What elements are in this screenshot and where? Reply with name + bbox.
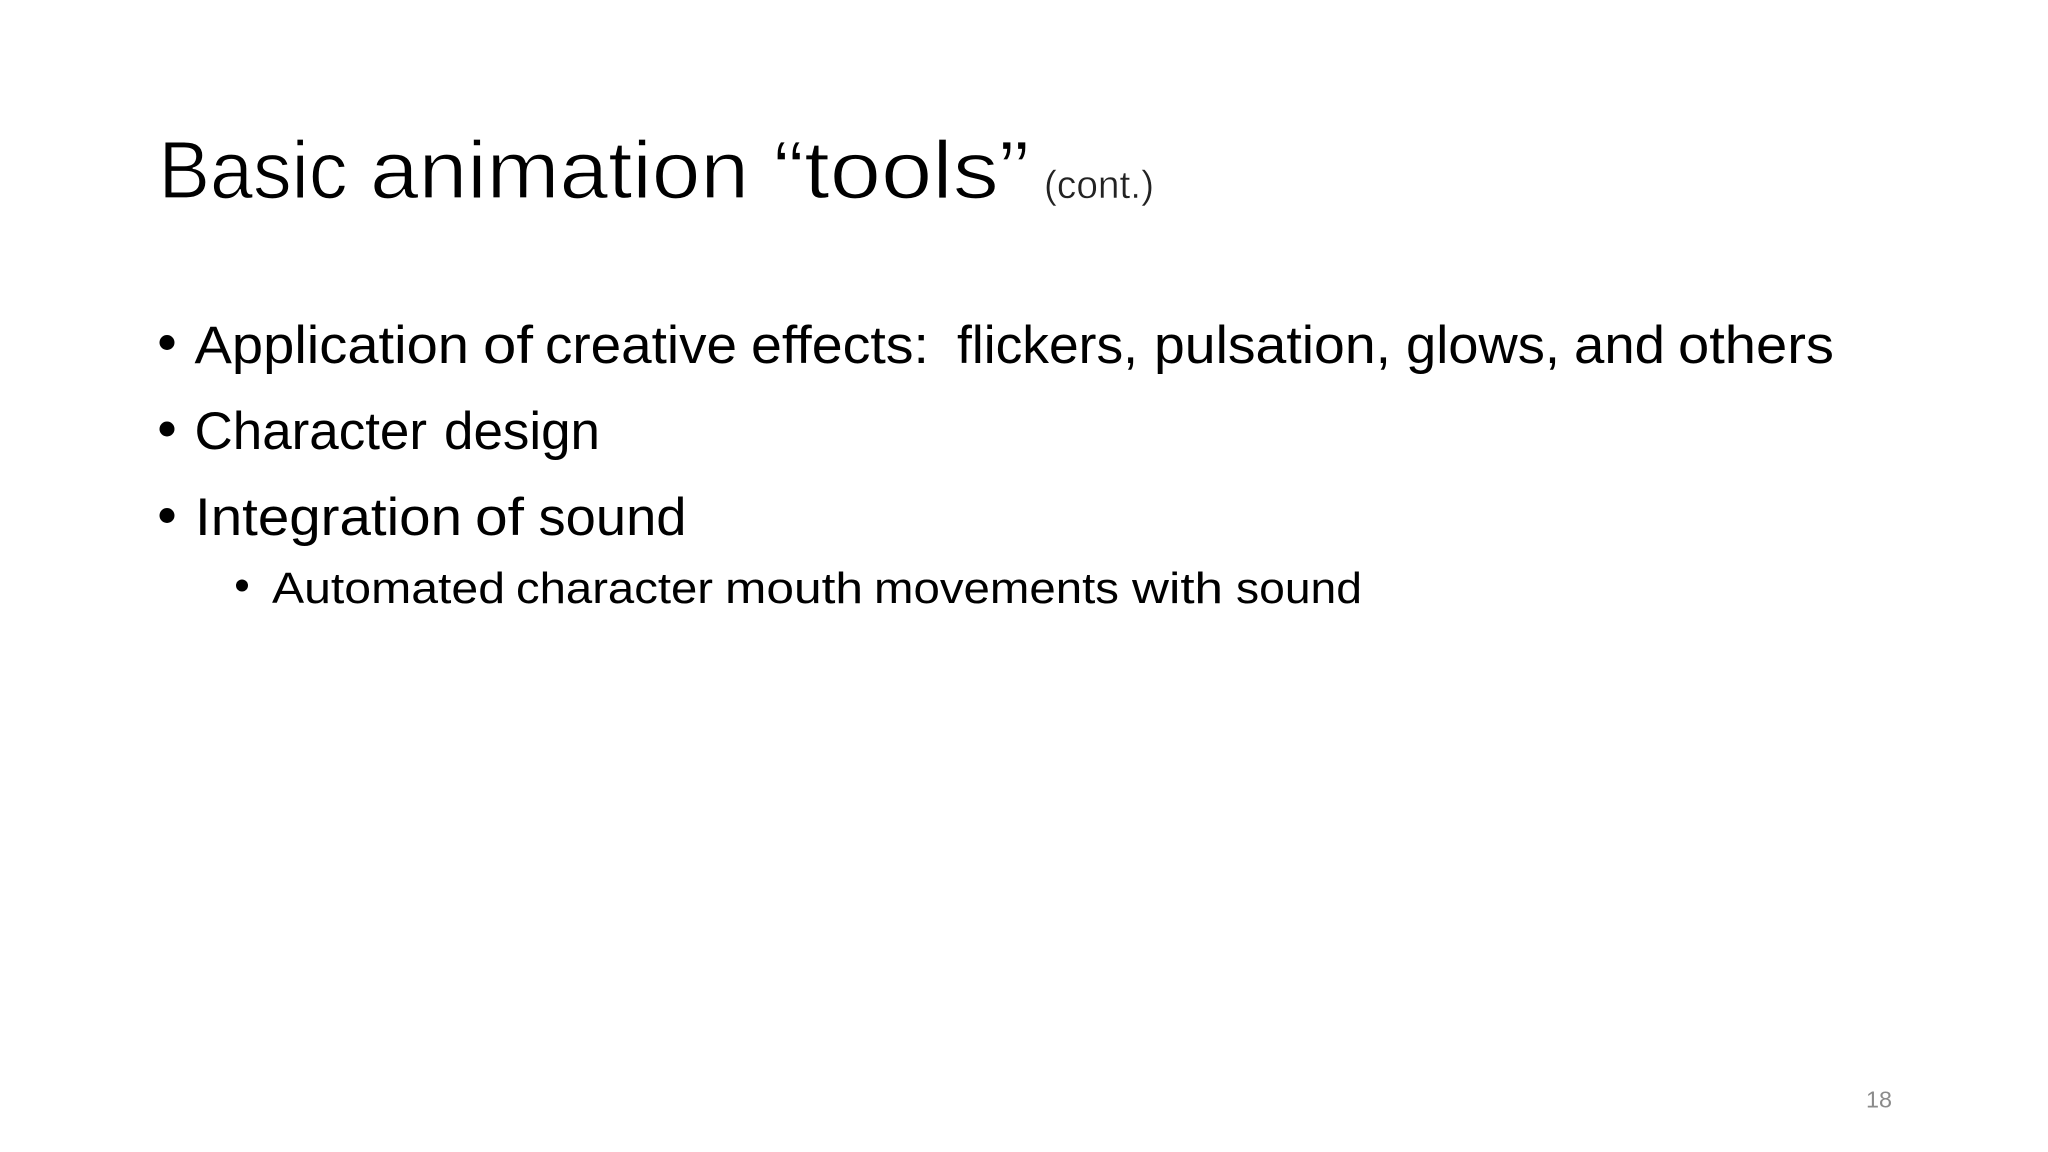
- sub-bullet: mouth movements: movements: [874, 564, 1119, 613]
- bullet: creative effects: glows,: [1406, 316, 1560, 375]
- title: “tools”: [774, 125, 1030, 216]
- bullet: creative effects: creative: [545, 316, 737, 375]
- sub-bullet: mouth movements: mouth: [725, 564, 863, 613]
- bullet: creative effects: Application: [194, 316, 469, 375]
- title: [158, 125, 1154, 216]
- bullet: character design: [160, 402, 600, 461]
- bullet: creative effects: flickers,: [957, 316, 1138, 375]
- bullet: creative effects: and: [1574, 316, 1665, 375]
- sub-bullet: mouth movements: sound: [1236, 564, 1362, 613]
- bullet: creative effects: others: [1678, 316, 1834, 375]
- bullet: creative effects: pulsation,: [1154, 316, 1391, 375]
- title: animation: [370, 125, 749, 216]
- title suffix: cont.: (cont.): [1044, 164, 1154, 207]
- bullet: integration of sound: [160, 488, 686, 547]
- bullet: creative effects: of: [483, 316, 533, 375]
- page number: 18: [1866, 1086, 1892, 1112]
- sub-bullet: mouth movements: Automated: [272, 564, 505, 613]
- bullet: creative effects: [160, 316, 1834, 375]
- bullet list: [160, 316, 1834, 613]
- bullet: character design: design: [444, 402, 600, 461]
- sub-bullet: mouth movements: with: [1131, 564, 1223, 613]
- bullet: creative effects: effects:: [751, 316, 929, 375]
- bullet: integration of sound: Integration: [195, 488, 462, 547]
- bullet: character design: Character: [194, 402, 427, 461]
- bullet: integration of sound: of: [475, 488, 524, 547]
- sub-bullet: mouth movements: character: [516, 564, 713, 613]
- title: Basic: [158, 125, 348, 216]
- sub-bullet: mouth movements: [236, 564, 1362, 613]
- bullet: integration of sound: sound: [538, 488, 686, 547]
